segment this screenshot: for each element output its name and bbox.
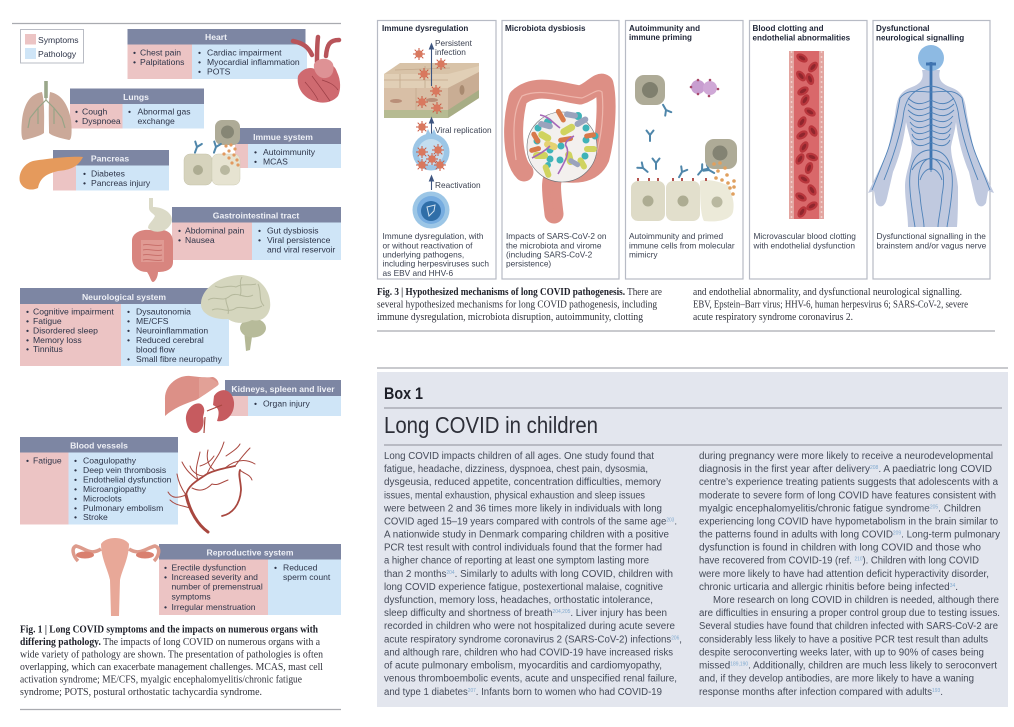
panel: blood vessels: Coagulopathy [83, 456, 137, 466]
text block: left column: COVID aged 15–19 years compared with controls of the same age [384, 516, 679, 528]
panel: immune dysregulation: Persistent [435, 38, 473, 48]
text block: right column: 209 [893, 530, 901, 536]
panel: neurological system: • [127, 316, 130, 326]
panel: blood vessels: Endothelial dysfunction [83, 474, 172, 484]
panel: heart: Palpitations [140, 57, 184, 67]
text block: left column: were between 2 and 36 times more likely in individuals with long [383, 504, 662, 514]
panel: autoimmunity and immune priming: Autoimmunity and [629, 24, 700, 33]
text block: right column: the patterns found in adults with long COVID [699, 530, 896, 540]
text block: right column: . Additionally, children are much less likely to seroconvert [748, 660, 997, 672]
caption: figure 3: Fig. 3 | Hypothesized mechanisms of long COVID pathogenesis. There are [377, 287, 662, 298]
illustration: microbiota circle [527, 108, 598, 182]
panel: reproductive system: • [164, 602, 167, 612]
panel: gastrointestinal tract: Gastrointestinal tract [213, 210, 299, 220]
text block: left column: acute respiratory syndrome coronavirus 2 (SARS-CoV-2) infections [384, 634, 681, 646]
panel: immune dysregulation: Immune dysregulation, with [382, 231, 484, 241]
text block: right column: and, if they develop antibodies, are more likely to have a waning [699, 674, 974, 684]
text block: right column: were more likely to have had attention deficit hyperactivity disorder, [698, 569, 989, 580]
illustration: colon [514, 83, 606, 217]
panel: dysfunctional neurological signalling: Dysfunctional [876, 24, 930, 33]
panel: immune dysregulation: Reactivation [435, 180, 481, 190]
text block: left column: fatigue, headache, dizziness, dyspnoea, chest pain, dysosmia, [384, 464, 648, 475]
text block: right column: considerably less likely to have a positive PCR test result than adults [699, 634, 988, 646]
text block: right column: 34 [950, 583, 955, 589]
icon: pancreas [20, 157, 83, 190]
text block: right column: . Children [938, 504, 981, 514]
panel: autoimmunity and immune priming: mimicry [629, 250, 658, 260]
panel: pancreas: • [83, 178, 86, 188]
panel: blood vessels: • [74, 494, 77, 504]
caption: figure 3: EBV, Epstein–Barr virus; HHV-6, human herpesvirus 6; SARS-CoV-2, severe [693, 300, 968, 310]
panel: gastrointestinal tract: Abdominal pain [185, 226, 244, 236]
text block: right column: diagnosis in the first year after delivery [699, 464, 870, 475]
panel: immune dysregulation: underlying pathogens, [382, 250, 464, 260]
panel: reproductive system: sperm count [283, 572, 331, 582]
panel: gastrointestinal tract: • [178, 235, 181, 245]
icon: brain [201, 275, 270, 351]
panel: reproductive system: • [164, 572, 167, 582]
text block: right column [698, 451, 1000, 698]
legend: Pathology [38, 49, 77, 59]
panel: autoimmunity and immune priming: Autoimmunity and primed [629, 231, 723, 241]
text block: right column: 205 [930, 504, 938, 510]
caption: figure 3 [377, 287, 968, 323]
panel: blood vessels: • [74, 465, 77, 475]
panel: blood vessels: • [74, 484, 77, 494]
panel: heart: • [198, 66, 201, 76]
text block: right column: chronic urticaria and allergic rhinitis before being infected [699, 582, 951, 593]
panel: reproductive system: Reproductive system [207, 548, 294, 558]
text block: left column: and although rare, children who had COVID-19 have increased risks [384, 648, 673, 658]
panel: autoimmunity and immune priming [626, 20, 743, 279]
panel: immune dysregulation [378, 20, 496, 279]
panel: neurological system: • [127, 354, 130, 364]
arrows [430, 44, 434, 190]
panel: lungs: Abnormal gas [138, 106, 191, 116]
panel: neurological system: Tinnitus [33, 344, 63, 354]
text block: right column: response months after infection compared with adults [699, 687, 936, 698]
panel: reproductive system: number of premenstrual [172, 582, 263, 592]
caption: figure 1: syndrome; POTS, postural orthostatic tachycardia syndrome. [20, 687, 262, 698]
text block: left column [383, 451, 682, 698]
panel: immune dysregulation: or without reactivation of [382, 240, 473, 250]
text block: left column: . Similarly to adults with long COVID, children with [455, 569, 673, 580]
illustration: immune cell and antibodies [631, 75, 737, 221]
panel: immune system: • [254, 147, 257, 157]
panel: gastrointestinal tract: • [178, 226, 181, 236]
panel: neurological system: Fatigue [33, 316, 62, 326]
panel: neurological system: • [127, 306, 130, 316]
text block: right column: More research on long COVID in children is needed, although there [713, 595, 999, 606]
panel: heart: • [198, 57, 201, 67]
panel: lungs: exchange [138, 116, 175, 126]
panel: blood vessels: Pulmonary embolism [83, 503, 163, 513]
panel: immune system: • [254, 156, 257, 166]
panel: heart: • [133, 48, 136, 58]
panel: gastrointestinal tract: Nausea [185, 235, 215, 245]
panel: lungs: • [75, 106, 78, 116]
panel: blood clotting and endothelial abnormalities: Microvascular blood clotting [754, 231, 856, 241]
panel: blood clotting and endothelial abnormalities: with endothelial dysfunction [752, 240, 855, 250]
panel: autoimmunity and immune priming: immune priming [629, 33, 692, 42]
panel: kidneys, spleen and liver: Organ injury [263, 398, 311, 408]
panel: neurological system: ME/CFS [136, 316, 169, 326]
text block: left column: . Infants born to women who had COVID-19 [476, 687, 662, 698]
panel: blood vessels: Microclots [83, 494, 122, 504]
heading: box 1: Box 1 [384, 385, 423, 403]
panel: reproductive system [159, 544, 341, 615]
panel: neurological system: Cognitive impairment [33, 306, 114, 316]
panel: blood vessels: Fatigue [33, 456, 62, 466]
text block: left column: of acute pulmonary embolism, myocarditis and cardiomyopathy, [384, 660, 662, 672]
panel: lungs: Dyspnoea [82, 116, 121, 126]
text block: right column: 189,190 [730, 662, 748, 668]
text block: left column: than 2 months [384, 569, 447, 580]
panel: heart: Cardiac impairment [207, 48, 282, 58]
text block: right column: ). Children with long COVID [862, 556, 979, 566]
panel: reproductive system: symptoms [172, 592, 211, 602]
text block: right column: moderate to severe form of long COVID have features consistent with [699, 490, 996, 502]
icon: heart [293, 37, 340, 103]
panel: dysfunctional neurological signalling: neurological signalling [876, 34, 964, 42]
panel: blood vessels: Stroke [83, 512, 108, 522]
text block: left column: 203 [666, 518, 675, 524]
panel: reproductive system: Increased severity and [172, 572, 258, 582]
panel: reproductive system: • [274, 562, 277, 572]
panel: microbiota dysbiosis: (including SARS-CoV-2 [506, 250, 593, 260]
panel: immune dysregulation: including herpesviruses such [382, 258, 489, 268]
text block: right column: . [940, 687, 943, 698]
panel: gastrointestinal tract: • [258, 235, 261, 245]
panel: immune dysregulation: Viral replication [435, 125, 492, 135]
panel: heart: POTS [207, 66, 231, 76]
panel: pancreas: Pancreas injury [91, 178, 151, 188]
text block: right column: centre’s experience treating patients suggests that adolescents with a [699, 477, 998, 488]
panel: heart [128, 29, 307, 79]
panel: neurological system: Disordered sleep [33, 326, 98, 336]
panel: neurological system: Neurological system [82, 292, 166, 302]
panel: blood vessels: • [74, 474, 77, 484]
text block: right column: 210 [855, 556, 863, 562]
illustration: epithelium with viruses [384, 48, 479, 133]
panel: kidneys, spleen and liver: • [254, 398, 257, 408]
legend: Symptoms [38, 35, 79, 45]
panel: kidneys, spleen and liver [225, 380, 341, 416]
panel: lungs [70, 88, 204, 128]
panel: blood vessels: • [74, 456, 77, 466]
text block: right column: Several studies have found that children infected with SARS-CoV-2 are [699, 621, 998, 632]
text block: left column: recorded in children who were not hospitalized during acute severe [384, 621, 675, 632]
panel: microbiota dysbiosis: Microbiota dysbiosis [505, 24, 586, 33]
text block: right column: dysfunction is found in children with long COVID and those who [699, 542, 981, 554]
panel: neurological system: Small fibre neuropathy [136, 354, 223, 364]
text block: right column: myalgic encephalomyelitis/chronic fatigue syndrome [699, 504, 930, 514]
illustration: infected cell [412, 129, 450, 171]
text block: left column: 204,205 [552, 609, 571, 615]
panel: reproductive system: Erectile dysfunction [172, 562, 246, 572]
text block: left column: . [674, 516, 677, 528]
panel: gastrointestinal tract [172, 207, 341, 260]
panel: microbiota dysbiosis [502, 20, 619, 279]
panel: lungs: • [75, 116, 78, 126]
icon: uterus [73, 538, 159, 616]
panel: microbiota dysbiosis: persistence) [506, 258, 551, 268]
panel: pancreas: • [83, 168, 86, 178]
panel: immune system: Immue system [253, 132, 313, 142]
panel: blood vessels: • [26, 456, 29, 466]
panel: kidneys, spleen and liver: Kidneys, spleen and liver [231, 384, 335, 394]
caption: figure 1: Fig. 1 | Long COVID symptoms and the impacts on numerous organs with [20, 624, 318, 636]
text block: left column: dysfunction, memory loss, headaches, orthostatic intolerance, [384, 595, 653, 606]
text block: left column: dysgeusia, reduced appetite, concentration difficulties, memory [384, 477, 661, 488]
panel: neurological system: • [26, 335, 29, 345]
text block: right column: 193 [932, 688, 940, 694]
illustration: latent cell [412, 192, 450, 228]
panel: pancreas [53, 150, 169, 190]
text block: right column: missed [699, 660, 731, 672]
text block: right column: . [955, 582, 958, 593]
panel: immune dysregulation: infection [435, 47, 466, 57]
text block: left column: venous thromboembolic events, acute and unspecified renal failure, [384, 674, 677, 684]
panel: microbiota dysbiosis: the microbiota and virome [506, 240, 602, 250]
title: Long COVID in children [384, 412, 598, 438]
text block: left column: 204 [446, 570, 455, 576]
panel: heart: Myocardial inflammation [207, 57, 300, 67]
illustration: blood vessel with red cells [789, 51, 824, 219]
panel: neurological system: Neuroinflammation [136, 326, 208, 336]
panel: gastrointestinal tract: Viral persistence [267, 235, 331, 245]
text block: left column: A nationwide study in Denmark comparing children with a positive [384, 530, 669, 540]
text block: left column: Long COVID impacts children of all ages. One study found that [384, 451, 654, 462]
text block: right column: despite seroconverting weeks later, with up to 90% of cases being [699, 648, 984, 658]
text block: right column: . Long-term pulmonary [901, 530, 1000, 540]
panel: blood vessels: • [74, 512, 77, 522]
caption: figure 3: several hypothesized mechanisms for long COVID pathogenesis, including [377, 300, 658, 310]
icon: liver and kidneys [165, 376, 234, 433]
panel: gastrointestinal tract: • [258, 226, 261, 236]
text block: left column: issues, mental exhaustion, physical exhaustion and sleep issues [384, 490, 645, 502]
panel: blood vessels [20, 437, 178, 524]
panel: blood vessels: • [74, 503, 77, 513]
panel: immune dysregulation: Immune dysregulation [382, 24, 468, 33]
text block: left column: 207 [468, 688, 476, 694]
panel: neurological system: Dysautonomia [136, 306, 191, 316]
panel: blood clotting and endothelial abnormalities: Blood clotting and [752, 24, 824, 33]
caption: figure 1: differing pathology. The impacts of long COVID on numerous organs with a [20, 637, 320, 648]
panel: immune system: Autoimmunity [263, 147, 316, 157]
panel: reproductive system: Reduced [283, 562, 318, 572]
text block: right column: . A paediatric long COVID [878, 464, 992, 475]
caption: figure 1 [20, 624, 324, 698]
panel: pancreas: Pancreas [91, 154, 129, 164]
panel: box 1 long COVID in children [377, 372, 1008, 707]
panel: neurological system: • [127, 335, 130, 345]
panel: microbiota dysbiosis: Impacts of SARS-CoV-2 on [506, 231, 607, 241]
panel: immune dysregulation: as EBV and HHV-6 [382, 268, 453, 278]
panel: neurological system: • [26, 316, 29, 326]
panel: heart: • [198, 48, 201, 58]
panel: neurological system: Reduced cerebral [136, 335, 204, 345]
icon: stomach and intestine [132, 198, 173, 282]
panel: gastrointestinal tract: Gut dysbiosis [267, 226, 319, 236]
caption: figure 3: and endothelial abnormality, and dysfunctional neurological signalling. [693, 287, 962, 298]
panel: blood vessels: Deep vein thrombosis [83, 465, 166, 475]
legend [20, 30, 84, 63]
text block: right column: have recovered from COVID-19 (ref. [699, 556, 860, 566]
panel: immune system [235, 128, 341, 168]
text block: left column: PCR test result with control individuals found that the former had [384, 542, 662, 554]
text block: left column: a higher chance of reporting at least one symptom lasting more [384, 556, 649, 566]
panel: blood clotting and endothelial abnormalities: endothelial abnormalities [752, 34, 851, 42]
panel: blood vessels: Microangiopathy [83, 484, 147, 494]
panel: heart: Chest pain [140, 48, 181, 58]
caption: figure 3: acute respiratory syndrome coronavirus 2. [693, 312, 853, 323]
panel: neurological system: Memory loss [33, 335, 82, 345]
panel: dysfunctional neurological signalling [868, 20, 994, 279]
text block: left column: . Liver injury has been [570, 608, 667, 619]
text block: left column: , [679, 634, 682, 646]
panel: pancreas: Diabetes [91, 168, 125, 178]
text block: left column: sleep difficulty and shortness of breath [384, 608, 554, 619]
caption: figure 1: activation syndrome; ME/CFS, myalgic encephalomyelitis/chronic fatigue [20, 674, 302, 686]
panel: dysfunctional neurological signalling: Dysfunctional signalling in the [876, 231, 986, 241]
icon: lungs [21, 81, 72, 140]
panel: heart: • [133, 57, 136, 67]
panel: blood clotting and endothelial abnormalities [750, 20, 867, 279]
text block: left column: long COVID experience fatigue, postexertional malaise, cognitive [384, 582, 663, 593]
text block: right column: 208 [870, 465, 879, 471]
panel: neurological system: blood flow [136, 344, 175, 354]
text block: right column: are difficulties in ensuring a proper control group due to testing issues. [699, 608, 1000, 619]
panel: neurological system: • [26, 326, 29, 336]
panel: neurological system: • [26, 344, 29, 354]
panel: reproductive system: • [164, 562, 167, 572]
panel: lungs: • [128, 106, 131, 116]
caption: figure 1: overlapping, which can exacerbate management challenges. MCAS, mast cell [20, 662, 323, 673]
caption: figure 3: immune dysregulation, microbiota disruption, autoimmunity, clotting [377, 312, 644, 323]
panel: lungs: Cough [82, 106, 108, 116]
text block: left column: 206 [671, 636, 680, 642]
panel: autoimmunity and immune priming: immune cells from molecular [629, 240, 735, 250]
panel: neurological system: • [127, 326, 130, 336]
text block: left column: and type 1 diabetes [384, 687, 471, 698]
panel: neurological system: • [26, 306, 29, 316]
panel: heart: Heart [205, 32, 227, 42]
panel: lungs: Lungs [123, 92, 149, 102]
panel: blood vessels: Blood vessels [70, 440, 128, 450]
icon: blood vessel tree [168, 442, 255, 532]
caption: figure 1: wide variety of pathology are shown. The presentation of pathologies is often [20, 650, 324, 660]
text block: right column: during pregnancy were more likely to receive a neurodevelopmental [699, 451, 993, 462]
panel: neurological system [20, 288, 229, 366]
panel: immune system: MCAS [263, 156, 288, 166]
icon: immune cells [184, 120, 240, 185]
panel: reproductive system: Irregular menstruation [172, 602, 256, 612]
text block: right column: experiencing long COVID have hypometabolism in the brain similar to [699, 516, 998, 528]
panel: gastrointestinal tract: and viral reservoir [267, 244, 335, 254]
panel: dysfunctional neurological signalling: brainstem and/or vagus nerve [876, 240, 987, 250]
illustration: nervous system [868, 45, 994, 227]
